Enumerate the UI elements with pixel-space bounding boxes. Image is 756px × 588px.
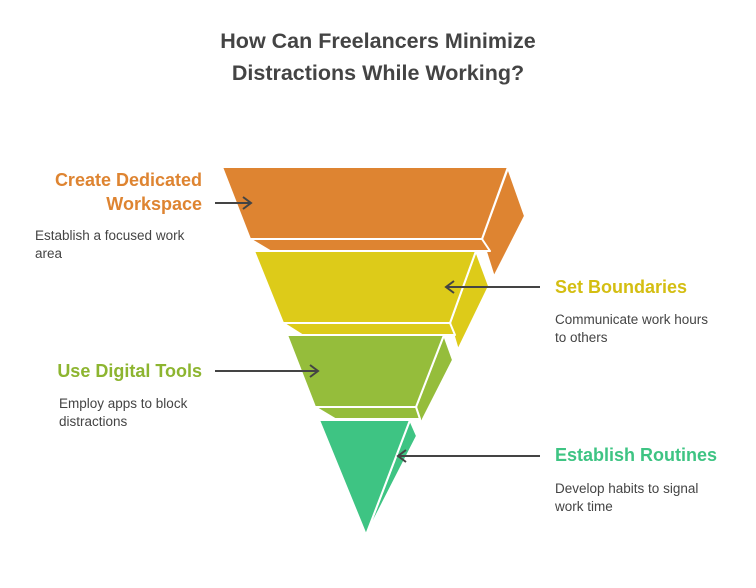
label: Establish Routines: Establish Routines (555, 445, 717, 465)
funnel level: orange (222, 167, 525, 277)
desc: workspace (35, 228, 184, 261)
funnel level: yellow (254, 251, 489, 350)
desc: boundaries: to others (555, 330, 608, 345)
desc: routines: work time (555, 499, 613, 514)
funnel level: green (287, 335, 453, 423)
title (220, 29, 536, 85)
label: Create Dedicated Workspace (55, 170, 202, 214)
desc: tools (59, 396, 188, 429)
desc: workspace: area (35, 246, 62, 261)
desc: tools: distractions (59, 414, 127, 429)
desc: boundaries: Communicate work hours (555, 312, 708, 327)
desc: routines: Develop habits to signal (555, 481, 698, 496)
title: Distractions While Working? (232, 61, 524, 85)
desc: workspace: Establish a focused work (35, 228, 184, 243)
title: How Can Freelancers Minimize (220, 29, 536, 53)
desc: routines (555, 481, 698, 514)
label: Set Boundaries: Set Boundaries (555, 277, 687, 297)
label: Use Digital Tools: Use Digital Tools (57, 361, 202, 381)
desc: boundaries (555, 312, 708, 345)
label: Create Dedicated Workspace: Create Dedicated (55, 170, 202, 190)
funnel level: teal (319, 420, 417, 535)
label: Create Dedicated Workspace: Workspace (106, 194, 202, 214)
arrows (215, 197, 540, 462)
desc: tools: Employ apps to block (59, 396, 187, 411)
